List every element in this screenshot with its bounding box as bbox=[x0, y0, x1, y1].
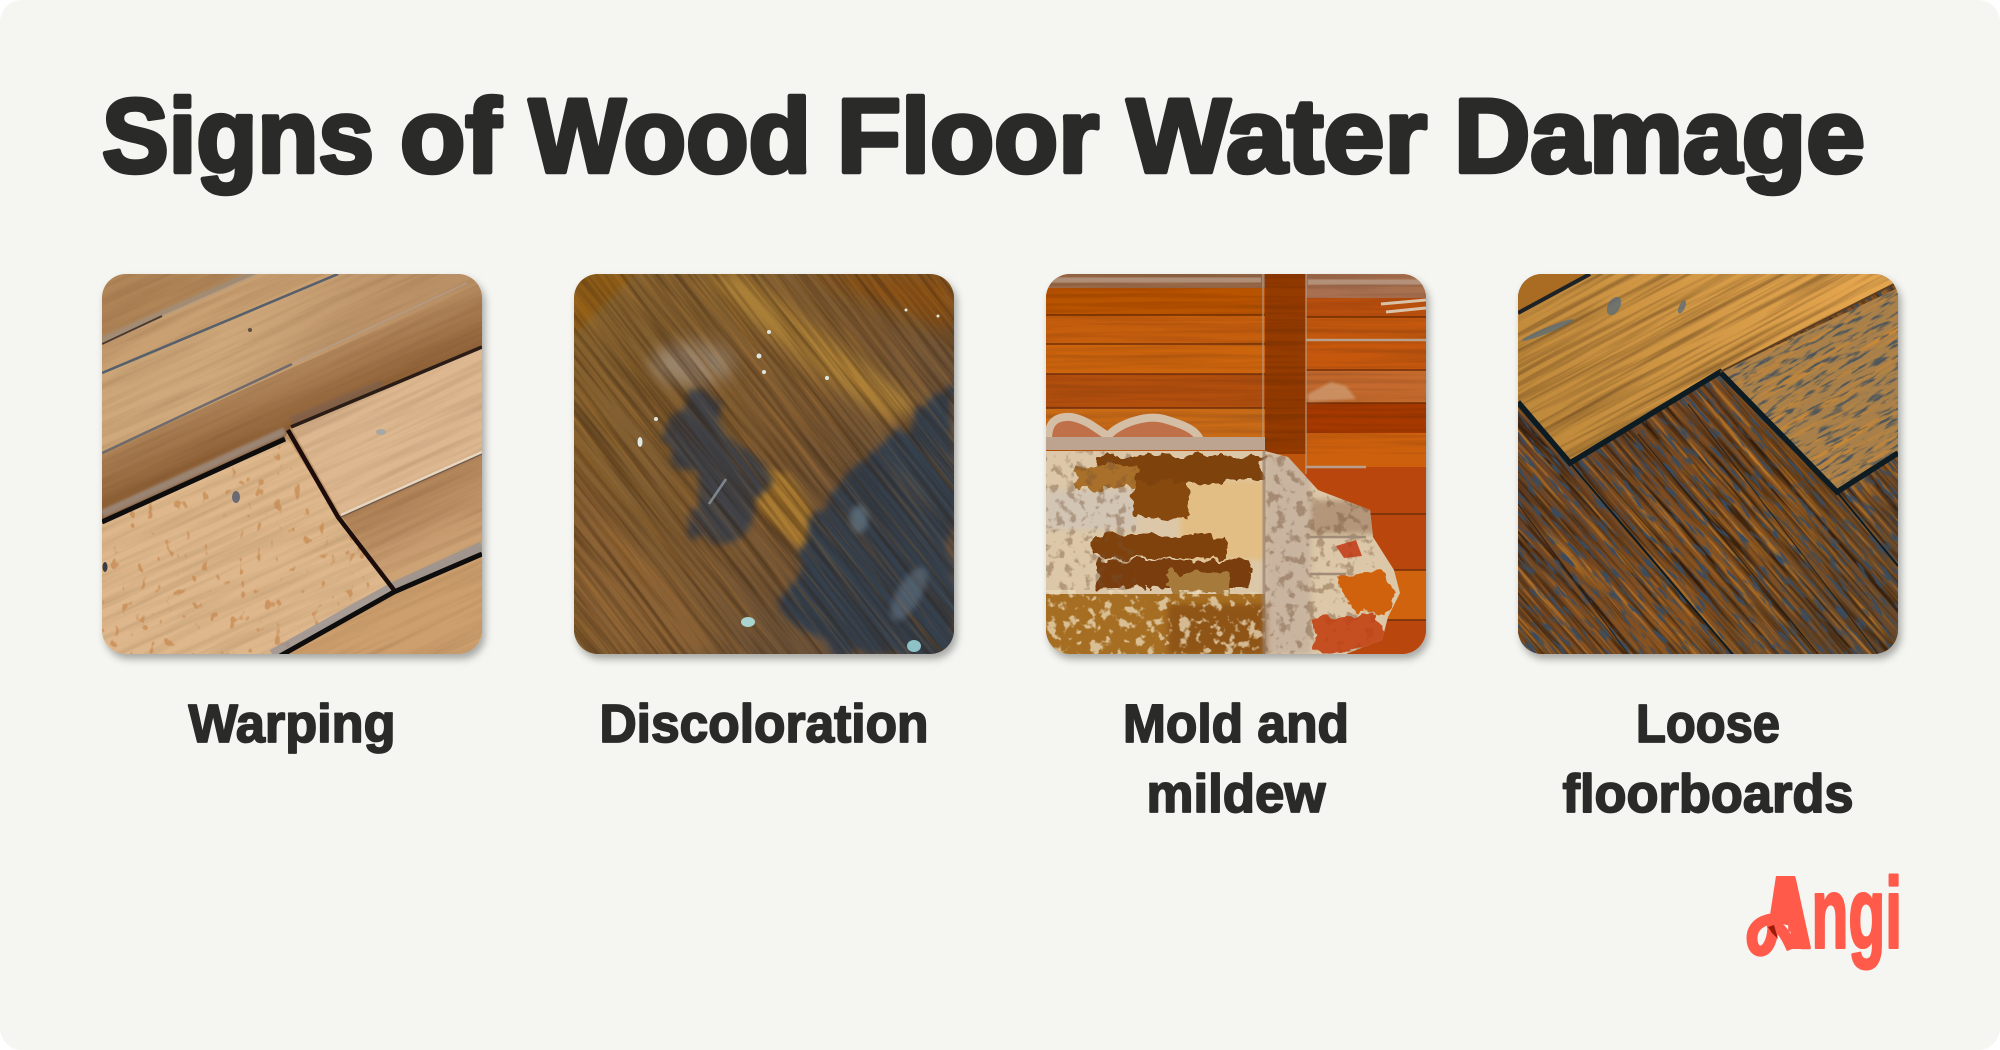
image: warped wood planks bbox=[100, 274, 490, 664]
label: mold and mildew: mildew bbox=[1146, 764, 1326, 824]
title: Damage bbox=[1454, 78, 1865, 195]
panel: mold and mildew bbox=[1046, 274, 1426, 824]
label: loose floorboards: floorboards bbox=[1562, 764, 1854, 824]
image: moldy wood floor bbox=[1046, 274, 1426, 654]
image: discolored wood floor bbox=[572, 274, 962, 664]
panel: loose floorboards bbox=[1516, 274, 1906, 814]
title: of bbox=[400, 78, 502, 195]
logo: Angi bbox=[1746, 874, 1899, 970]
image: loose floorboards bbox=[1516, 274, 1906, 664]
mold scallop band bbox=[1046, 417, 1265, 450]
panel: warping bbox=[100, 274, 490, 754]
label: mold and mildew: Mold and bbox=[1123, 694, 1349, 754]
panel: discoloration bbox=[572, 274, 962, 744]
title: Water bbox=[1127, 78, 1427, 195]
label: loose floorboards bbox=[1562, 694, 1854, 824]
logo: Angi: Angi bbox=[1768, 858, 1902, 970]
title bbox=[102, 78, 1865, 195]
title: Floor bbox=[837, 78, 1099, 195]
label: loose floorboards: Loose bbox=[1636, 694, 1780, 754]
label: warping: Warping bbox=[188, 694, 396, 754]
label: discoloration: Discoloration bbox=[600, 694, 928, 754]
title: Signs bbox=[102, 78, 374, 195]
title: Wood bbox=[529, 78, 811, 195]
label: mold and mildew bbox=[1123, 694, 1349, 824]
